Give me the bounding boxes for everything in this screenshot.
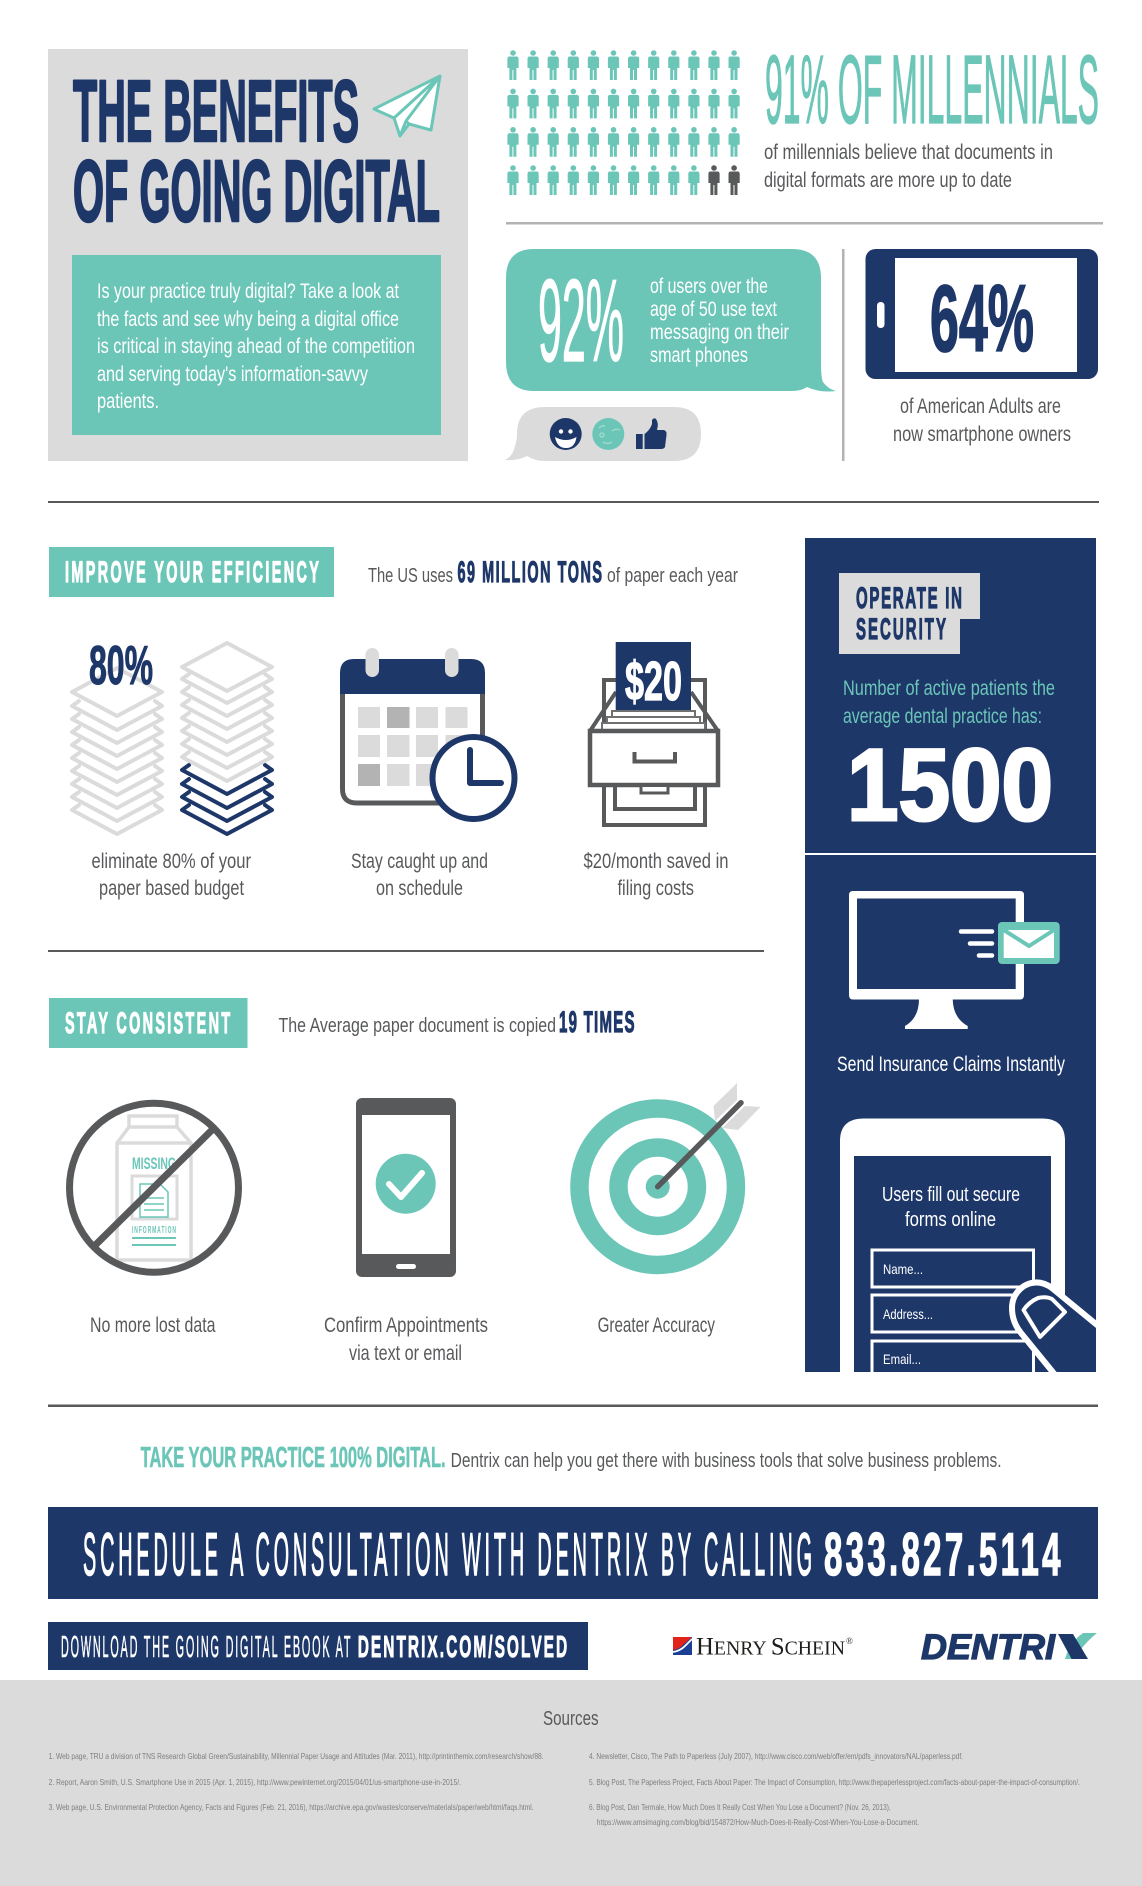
speech bubble: 92% of users: 92% [538,255,624,386]
sources left column: 3. Web page, U.S. Environmental Protection Agency, Facts and Figures (Feb. 21, 2016), https://archive.epa.gov/wastes/conserve/materials/paper/web/html/faqs.html. [49,1802,534,1812]
stat: 91% of millennials [764,35,1099,192]
security heading [839,573,980,654]
icon: filing cabinet with twenty dollars: $20 [625,650,682,712]
banner: schedule a consultation: 833.827.5114 [824,1522,1061,1589]
caption: filing costs: $20/month saved in [584,850,728,873]
copy statistic [278,1007,634,1040]
active patients text [843,677,1055,728]
stat: 91% of millennials: digital formats are more up to date [764,169,1012,192]
caption: paper budget: paper based budget [99,877,244,900]
copy statistic: The Average paper document is copied [278,1014,556,1037]
icon: tablet with secure form: Users fill out secure [882,1184,1020,1206]
section heading: stay consistent [49,998,248,1048]
icon: target and arrow [579,1083,760,1265]
caption: smartphone owners: of American Adults are [900,395,1061,418]
pictogram: 91 percent of people [507,50,740,195]
paper use statistic: of paper each year [607,564,738,587]
infographic canvas: OF GOING DIGITAL [73,143,440,240]
icon: calendar and clock [340,648,514,819]
caption: paper budget [92,850,251,900]
icon: tablet with secure form [840,1118,1102,1386]
title [73,63,440,240]
banner: download ebook: DOWNLOAD THE GOING DIGITAL EBOOK AT [61,1629,350,1664]
icon: winking face [592,418,624,450]
80 percent label: 80% [89,634,153,696]
caption: greater accuracy: Greater Accuracy [598,1314,715,1337]
speech bubble: emoji reply [505,407,701,461]
title: THE BENEFITS [73,63,359,160]
caption: filing costs [584,850,728,900]
smartphone: 64% [866,249,1098,379]
icon: paper airplane [374,76,440,136]
sources left column: 2. Report, Aaron Smith, U.S. Smartphone Use in 2015 (Apr. 1, 2015), http://www.pewinternet.org/2015/04/01/us-smartphone-use-in-2015/. [49,1777,461,1787]
milk carton [117,1116,191,1260]
logo: Henry Schein: ® [846,1636,853,1646]
call to action statement [141,1442,1002,1474]
banner: schedule a consultation [48,1507,1098,1599]
icon: tablet with secure form: Email... [883,1351,921,1367]
caption: on schedule: Stay caught up and [351,850,488,873]
logo: Henry Schein: HENRY SCHEIN [696,1634,845,1660]
active patients text: Number of active patients the [843,677,1055,700]
speech bubble: 92% of users [506,249,836,392]
icon: tablet with secure form: Name... [883,1261,923,1277]
sources right column: https://www.amsimaging.com/blog/bid/154872/How-Much-Does-it-Really-Cost-When-You-Lose-a-Document. [597,1817,919,1827]
1500 number: 1500 [847,728,1053,842]
smartphone: 64%: 64% [930,266,1034,372]
caption: on schedule: on schedule [376,877,463,900]
paper use statistic: 69 MILLION TONS [458,555,602,588]
paper use statistic [368,555,738,588]
banner: schedule a consultation: SCHEDULE A CONSULTATION WITH DENTRIX BY CALLING [83,1523,812,1588]
banner: download ebook: DENTRIX.COM/SOLVED [358,1630,567,1665]
icon: paper stacks [72,634,272,834]
left paper stack [72,668,162,834]
icon: fingertip [1012,1282,1102,1376]
caption: smartphone owners: now smartphone owners [893,423,1071,446]
introduction box: Is your practice truly digital? Take a look at [97,280,399,303]
introduction box [72,255,441,435]
panel: title and introduction [48,49,468,461]
caption: insurance claims: Send Insurance Claims Instantly [837,1053,1065,1076]
sources right column: 6. Blog Post, Dan Termale, How Much Does It Really Cost When You Lose a Document? (Nov. 26, 2013), [589,1802,891,1812]
icon: phone with check mark [356,1098,456,1277]
icon: filing cabinet with twenty dollars [590,642,718,825]
security heading: OPERATE IN [856,583,962,616]
caption: paper budget: eliminate 80% of your [92,850,251,873]
copy statistic: 19 TIMES [559,1007,634,1040]
caption: smartphone owners [893,395,1071,446]
caption: lost data: No more lost data [90,1314,216,1337]
banner: download ebook [48,1622,588,1670]
introduction box: the facts and see why being a digital office [97,308,399,331]
sources right column: 4. Newsletter, Cisco, The Path to Paperless (July 2007), http://www.cisco.com/web/offer/em/pdfs_innovators/NAL/paperless.pdf. [589,1751,963,1761]
icon: no missing information [70,1103,238,1272]
sources left column [49,1751,544,1812]
panel: sources [0,1680,1142,1886]
icon: smiley [550,418,582,450]
stat: 91% of millennials: of millennials believe that documents in [764,141,1053,164]
speech bubble: 92% of users: age of 50 use text [650,298,777,321]
icon: thumbs up [636,418,667,449]
paper use statistic: The US uses [368,564,453,587]
icon: monitor with envelope [849,891,1060,1029]
caption: confirm appointments [324,1314,488,1365]
introduction box: patients. [97,390,159,413]
call to action statement: TAKE YOUR PRACTICE 100% DIGITAL. [141,1442,446,1474]
caption: confirm appointments: Confirm Appointments [324,1314,488,1337]
introduction box: and serving today's information-savvy [97,363,368,386]
security heading: SECURITY [856,614,946,647]
panel: operate in security [805,538,1102,1386]
sources right column [589,1751,1080,1827]
sources left column: 1. Web page, TRU a division of TNS Research Global Green/Sustainability, Millennial Paper Usage and Attitudes (Mar. 2011), http://printinthemix.com/research/show/88. [49,1751,544,1761]
section heading: improve your efficiency [49,547,334,597]
icon: tablet with secure form: Address... [883,1306,933,1322]
milk carton: INFORMATION [132,1224,176,1236]
section heading: stay consistent: STAY CONSISTENT [65,1006,231,1039]
speech bubble: 92% of users: messaging on their [650,321,789,344]
active patients text: average dental practice has: [843,705,1042,728]
logo: Dentrix: DENTRI [921,1628,1056,1667]
speech bubble: 92% of users: smart phones [650,344,748,367]
caption: confirm appointments: via text or email [349,1342,462,1365]
milk carton: MISSING [132,1154,176,1173]
icon: tablet with secure form: forms online [905,1209,996,1231]
sources heading: Sources [543,1708,599,1730]
caption: filing costs: filing costs [618,877,694,900]
speech bubble: 92% of users: of users over the [650,275,768,298]
caption: on schedule [351,850,488,900]
section heading: improve your efficiency: IMPROVE YOUR EFFICIENCY [65,555,319,588]
right paper stack [182,643,272,834]
introduction box: is critical in staying ahead of the competition [97,335,415,358]
